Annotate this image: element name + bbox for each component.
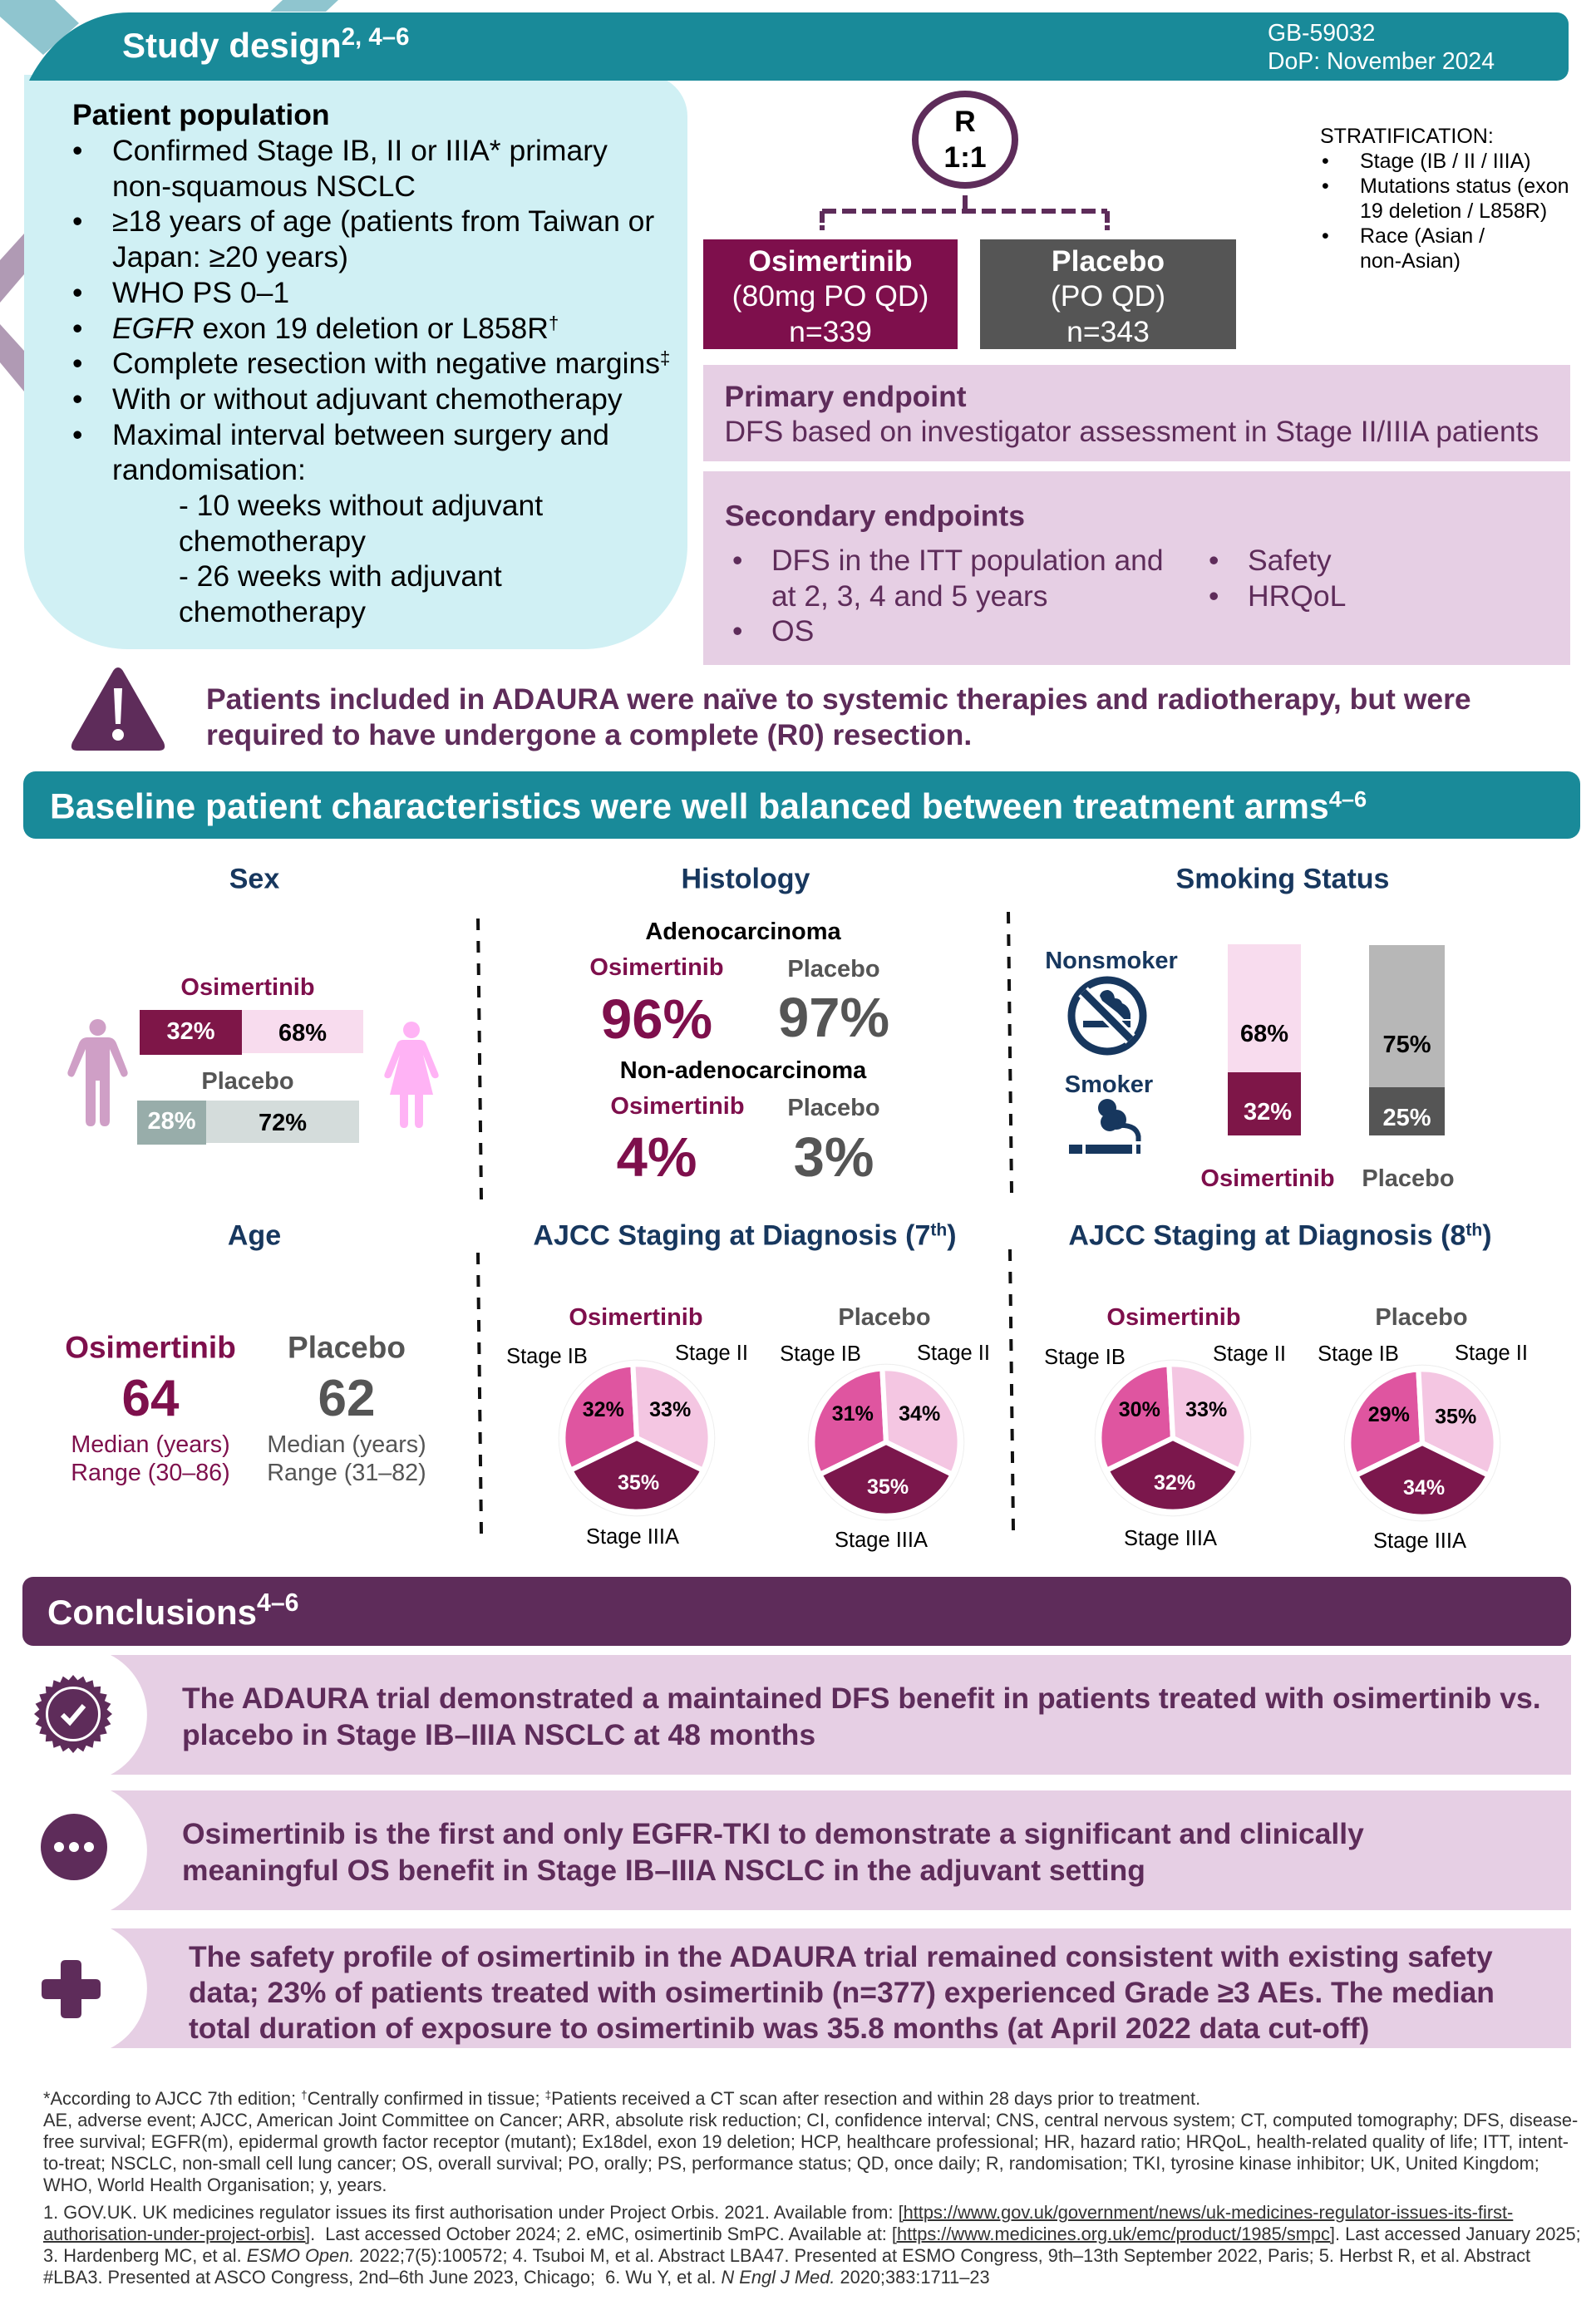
stratification list: •: [1322, 150, 1329, 173]
column: placebo age: [267, 1331, 426, 1486]
label: R 1:1: [943, 105, 987, 174]
footnotes and abbreviations: *According to AJCC 7th edition; †Centrally confirmed in tissue; ‡Patients received a CT scan after resection and within 28 days prior to treatment.: [43, 2088, 1200, 2109]
label: placebo: Placebo: [787, 956, 880, 983]
label: R 1:1: 1:1: [943, 140, 987, 174]
panel: histology: [589, 863, 889, 1189]
stratification list: •: [1322, 175, 1329, 198]
median and range: [71, 1431, 230, 1486]
pie: osimertinib 8th: 33%: [1185, 1398, 1227, 1421]
value: 4%: 4%: [617, 1126, 697, 1189]
value: 62: 62: [318, 1370, 375, 1427]
heading: sex: Sex: [229, 863, 279, 894]
bar: placebo smoking: [1369, 945, 1445, 1135]
stratification list: Mutations status (exon: [1360, 175, 1569, 198]
bullet list: inclusion criteria: WHO PS 0–1: [112, 276, 289, 309]
references: authorisation-under-project-orbis]. Last accessed October 2024; 2. eMC, osimertinib SmPC. Available at: [https://www.medicines.org.uk/emc/product/1985/smpc]. Last accessed January 2025;: [43, 2224, 1581, 2244]
label: osimertinib: Osimertinib: [1106, 1304, 1241, 1331]
heading: AJCC 8th: AJCC Staging at Diagnosis (8th): [1068, 1219, 1492, 1251]
label: osimertinib: Osimertinib: [180, 974, 315, 1001]
conclusion text 2: meaningful OS benefit in Stage IB–IIIA NSCLC in the adjuvant setting: [182, 1854, 1145, 1887]
references: 1. GOV.UK. UK medicines regulator issues its first authorisation under Project Orbis. 2021. Available from: [https://www.gov.uk/government/news/uk-medicines-regulator-issues-its-first-: [43, 2202, 1513, 2223]
section header: baseline characteristics: [23, 771, 1580, 839]
document code and date: DoP: November 2024: [1268, 48, 1495, 75]
label: stage II: Stage II: [1455, 1341, 1528, 1364]
footnotes and abbreviations: WHO, World Health Organisation; y, years.: [43, 2174, 387, 2195]
pie: placebo 8th: [1343, 1365, 1501, 1521]
stratification list: •: [1322, 224, 1329, 248]
pie: placebo 7th: 34%: [899, 1402, 940, 1426]
label: stage IIIA: Stage IIIA: [835, 1528, 928, 1551]
panel: AJCC staging 7th: [506, 1219, 990, 1551]
label: non-adenocarcinoma: Non-adenocarcinoma: [620, 1057, 866, 1084]
document code and date: GB-59032: [1268, 20, 1375, 47]
segment: female 68%: 68%: [278, 1019, 327, 1046]
pie: placebo 8th: 29%: [1368, 1403, 1410, 1426]
list: left column: [733, 544, 1164, 648]
icon: man: [67, 1019, 128, 1126]
heading: smoking status: Smoking Status: [1176, 863, 1389, 894]
footnotes and abbreviations: to-treat; NSCLC, non-small cell lung cancer; OS, overall survival; PO, orally; PS, performance status; QD, once daily; R, randomisation; TKI, tyrosine kinase inhibitor; UK, United Kingdom;: [43, 2153, 1539, 2174]
labels: stages placebo: Stage IB: [780, 1342, 861, 1365]
panel: AJCC staging 8th: [1044, 1219, 1528, 1553]
conclusion text 2: [182, 1816, 1364, 1889]
arm: placebo: [980, 239, 1236, 349]
stratification list: 19 deletion / L858R): [1360, 199, 1547, 223]
label: osimertinib: Osimertinib: [65, 1331, 236, 1365]
conclusion text 1: placebo in Stage IB–IIIA NSCLC at 48 months: [182, 1717, 815, 1751]
arm: placebo: Placebo: [1052, 244, 1165, 278]
document code and date: [1268, 20, 1495, 75]
bullet list: inclusion criteria: randomisation:: [112, 453, 306, 486]
label: placebo: Placebo: [1362, 1165, 1455, 1192]
label: R 1:1: R: [954, 105, 976, 138]
icon: speech dots: [41, 1814, 107, 1880]
segment: nonsmoker 68%: [1228, 944, 1301, 1074]
warning message: [206, 682, 1471, 751]
bullet list: inclusion criteria: Confirmed Stage IB, II or IIIA* primary: [112, 134, 608, 167]
label: osimertinib: Osimertinib: [610, 1093, 745, 1120]
label: stage IIIA: Stage IIIA: [1373, 1529, 1466, 1552]
conclusion text 3: [189, 1939, 1495, 2046]
median and range: Range (30–86): [71, 1460, 230, 1486]
conclusion text 1: The ADAURA trial demonstrated a maintained DFS benefit in patients treated with osimertinib vs.: [182, 1682, 1541, 1715]
median and range: Median (years): [267, 1431, 426, 1458]
randomisation circle: [912, 91, 1018, 189]
pie: placebo 7th: 31%: [832, 1402, 874, 1426]
icon: warning triangle: [71, 667, 165, 751]
dashed dividers: [476, 912, 1015, 1534]
labels: stages osimertinib: Stage IB: [1044, 1345, 1126, 1368]
value: 3%: 3%: [794, 1126, 874, 1189]
label: stage II: Stage II: [917, 1341, 990, 1364]
conclusion row 3: [0, 1928, 1596, 2048]
references: [43, 2202, 1589, 2288]
icon: woman: [384, 1022, 439, 1128]
section header: study design: [29, 12, 1569, 81]
list: right column: [1209, 544, 1346, 613]
heading: baseline: Baseline patient characteristics were well balanced between treatment arms4–6: [50, 786, 1367, 827]
icon: no smoking: [1067, 976, 1147, 1056]
warning message: required to have undergone a complete (R0) resection.: [206, 718, 972, 751]
panel: sex: [67, 863, 439, 1145]
decorative background stripes: [0, 0, 338, 392]
list: right column: HRQoL: [1248, 579, 1346, 613]
footnotes and abbreviations: free survival; EGFR(m), epidermal growth factor receptor (mutant); Ex18del, exon 19 deletion; HCP, healthcare professional; HR, hazard ratio; HRQoL, health-related quality of life; ITT, intent-: [43, 2131, 1569, 2152]
arm: osimertinib: Osimertinib: [748, 244, 913, 278]
bullet list: inclusion criteria: EGFR exon 19 deletion or L858R†: [112, 312, 559, 345]
segment: male 32%: 32%: [166, 1018, 215, 1045]
bullet list: inclusion criteria: Complete resection with negative margins‡: [112, 347, 670, 380]
bar: osimertinib smoking: [1228, 944, 1301, 1135]
pie: osimertinib 8th: 30%: [1119, 1398, 1160, 1421]
icon: cigarette with smoke: [1069, 1099, 1140, 1154]
pie: osimertinib 7th: [559, 1360, 715, 1516]
label: smoker: Smoker: [1065, 1071, 1153, 1098]
section header: conclusions: [22, 1577, 1571, 1646]
footnotes and abbreviations: [43, 2088, 1589, 2196]
pie: osimertinib 7th: 32%: [583, 1398, 624, 1421]
panel: smoking status: [1045, 863, 1455, 1192]
segment: smoker 25%: [1369, 1087, 1445, 1135]
panel: patient population: [24, 75, 687, 649]
heading: patient population: Patient population: [72, 98, 330, 131]
segment: smoker 32%: 32%: [1244, 1099, 1292, 1125]
label: nonsmoker: Nonsmoker: [1045, 948, 1178, 974]
icon: verified badge: [34, 1675, 112, 1753]
panel: primary endpoint: DFS based on investigator assessment in Stage II/IIIA patients: [725, 415, 1539, 448]
conclusion text 1: [182, 1682, 1541, 1751]
stratification list: non-Asian): [1360, 249, 1461, 273]
list: left column: OS: [771, 614, 814, 648]
bullet list: inclusion criteria: Japan: ≥20 years): [112, 240, 348, 273]
pie: placebo 7th: [808, 1363, 964, 1521]
segment: male 28%: 28%: [147, 1108, 196, 1135]
label: placebo: Placebo: [201, 1068, 294, 1095]
panel: primary endpoint: [703, 365, 1570, 461]
value: 97%: 97%: [778, 987, 889, 1049]
pie: osimertinib 7th: 35%: [618, 1471, 659, 1495]
arm: osimertinib: [703, 239, 958, 349]
heading: study design: Study design2, 4–6: [122, 23, 409, 65]
arm: osimertinib: n=339: [789, 315, 872, 348]
heading: secondary endpoints: Secondary endpoints: [725, 499, 1025, 532]
segment: male 32%: [140, 1010, 242, 1054]
stratification list: STRATIFICATION:: [1320, 125, 1494, 148]
bullet list: inclusion criteria: - 10 weeks without adjuvant: [179, 489, 543, 522]
segment: female 72%: 72%: [259, 1109, 307, 1135]
label: placebo: Placebo: [787, 1095, 880, 1121]
stratification list: Stage (IB / II / IIIA): [1360, 150, 1531, 173]
bullet list: inclusion criteria: chemotherapy: [179, 525, 366, 558]
segment: nonsmoker 75%: 75%: [1382, 1032, 1431, 1058]
value: 64: 64: [122, 1370, 179, 1427]
references: #LBA3. Presented at ASCO Congress, 2nd–6th June 2023, Chicago; 6. Wu Y, et al. N Engl J Med. 2020;383:1711–23: [43, 2267, 990, 2288]
segment: male 28%: [137, 1101, 206, 1144]
stratification list: Race (Asian /: [1360, 224, 1485, 248]
stratification list: [1320, 125, 1569, 273]
label: stage II: Stage II: [1213, 1342, 1286, 1365]
heading: conclusions: Conclusions4–6: [47, 1589, 298, 1631]
bar: osimertinib sex split: [140, 1010, 363, 1053]
segment: nonsmoker 68%: 68%: [1240, 1021, 1288, 1047]
label: placebo: Placebo: [1375, 1304, 1468, 1331]
panel: age: [65, 1219, 426, 1486]
median and range: Range (31–82): [267, 1460, 426, 1486]
column: osimertinib age: [65, 1331, 236, 1486]
conclusion row 1: [34, 1655, 1571, 1775]
list: left column: at 2, 3, 4 and 5 years: [771, 579, 1047, 613]
pie: placebo 8th: 35%: [1435, 1405, 1476, 1428]
bar: placebo sex split: [137, 1101, 359, 1143]
conclusion text 3: data; 23% of patients treated with osimertinib (n=377) experienced Grade ≥3 AEs. The median: [189, 1976, 1495, 2009]
heading: AJCC 7th: AJCC Staging at Diagnosis (7th): [533, 1219, 957, 1251]
dashed connector arrows: [820, 195, 1110, 230]
bullet list: inclusion criteria: chemotherapy: [179, 595, 366, 628]
median and range: Median (years): [71, 1431, 230, 1458]
conclusion row 2: [0, 1790, 1596, 1910]
labels: stages osimertinib: Stage IB: [506, 1344, 588, 1367]
heading: histology: Histology: [682, 863, 810, 894]
label: stage IIIA: Stage IIIA: [1124, 1526, 1217, 1549]
label: stage IIIA: Stage IIIA: [586, 1524, 679, 1548]
bullet list: inclusion criteria: ≥18 years of age (patients from Taiwan or: [112, 204, 654, 238]
label: osimertinib: Osimertinib: [569, 1304, 703, 1331]
bullet list: inclusion criteria: With or without adjuvant chemotherapy: [112, 382, 623, 416]
pie: placebo 7th: 35%: [867, 1475, 909, 1499]
icon: plus: [42, 1960, 101, 2018]
labels: stages placebo: Stage IB: [1318, 1342, 1399, 1365]
median and range: [267, 1431, 426, 1486]
arm: placebo: (PO QD): [1051, 279, 1165, 313]
pie: placebo 8th: 34%: [1403, 1476, 1445, 1500]
conclusion text 2: Osimertinib is the first and only EGFR-TKI to demonstrate a significant and clinically: [182, 1817, 1364, 1850]
label: placebo: Placebo: [288, 1331, 406, 1365]
pie: osimertinib 8th: [1094, 1360, 1252, 1516]
segment: nonsmoker 75%: [1369, 945, 1445, 1089]
footnotes and abbreviations: AE, adverse event; AJCC, American Joint Committee on Cancer; ARR, absolute risk reduction; CI, confidence interval; CNS, central nervous system; CT, computed tomography; DFS, disease-: [43, 2110, 1578, 2130]
warning message: Patients included in ADAURA were naïve to systemic therapies and radiotherapy, but were: [206, 682, 1471, 716]
bullet list: inclusion criteria: non-squamous NSCLC: [112, 170, 416, 203]
arm: osimertinib: (80mg PO QD): [732, 279, 929, 313]
label: adenocarcinoma: Adenocarcinoma: [645, 919, 841, 945]
label: osimertinib: Osimertinib: [1200, 1165, 1335, 1192]
bullet list: inclusion criteria: Maximal interval between surgery and: [112, 418, 609, 451]
panel: secondary endpoints: [703, 471, 1570, 665]
arm: placebo: n=343: [1066, 315, 1150, 348]
label: osimertinib: Osimertinib: [589, 954, 724, 981]
value: 96%: 96%: [601, 988, 712, 1051]
list: left column: DFS in the ITT population and: [771, 544, 1164, 577]
conclusion text 3: total duration of exposure to osimertinib was 35.8 months (at April 2022 data cut-off): [189, 2012, 1369, 2045]
conclusion text 3: The safety profile of osimertinib in the ADAURA trial remained consistent with existing safety: [189, 1940, 1493, 1973]
segment: smoker 32%: [1228, 1072, 1301, 1135]
label: stage II: Stage II: [675, 1341, 748, 1364]
list: right column: Safety: [1248, 544, 1332, 577]
panel: primary endpoint: Primary endpoint: [725, 379, 967, 412]
references: 3. Hardenberg MC, et al. ESMO Open. 2022;7(5):100572; 4. Tsuboi M, et al. Abstract LBA47. Presented at ESMO Congress, 9th–13th September 2022, Paris; 5. Herbst R, et al. Abstract: [43, 2245, 1530, 2266]
bullet list: inclusion criteria: [73, 134, 670, 628]
bullet list: inclusion criteria: - 26 weeks with adjuvant: [179, 559, 502, 593]
label: placebo: Placebo: [838, 1304, 931, 1331]
pie: osimertinib 8th: 32%: [1154, 1471, 1195, 1495]
heading: age: Age: [228, 1219, 281, 1251]
pie: osimertinib 7th: 33%: [649, 1398, 691, 1421]
segment: smoker 25%: 25%: [1382, 1105, 1431, 1131]
